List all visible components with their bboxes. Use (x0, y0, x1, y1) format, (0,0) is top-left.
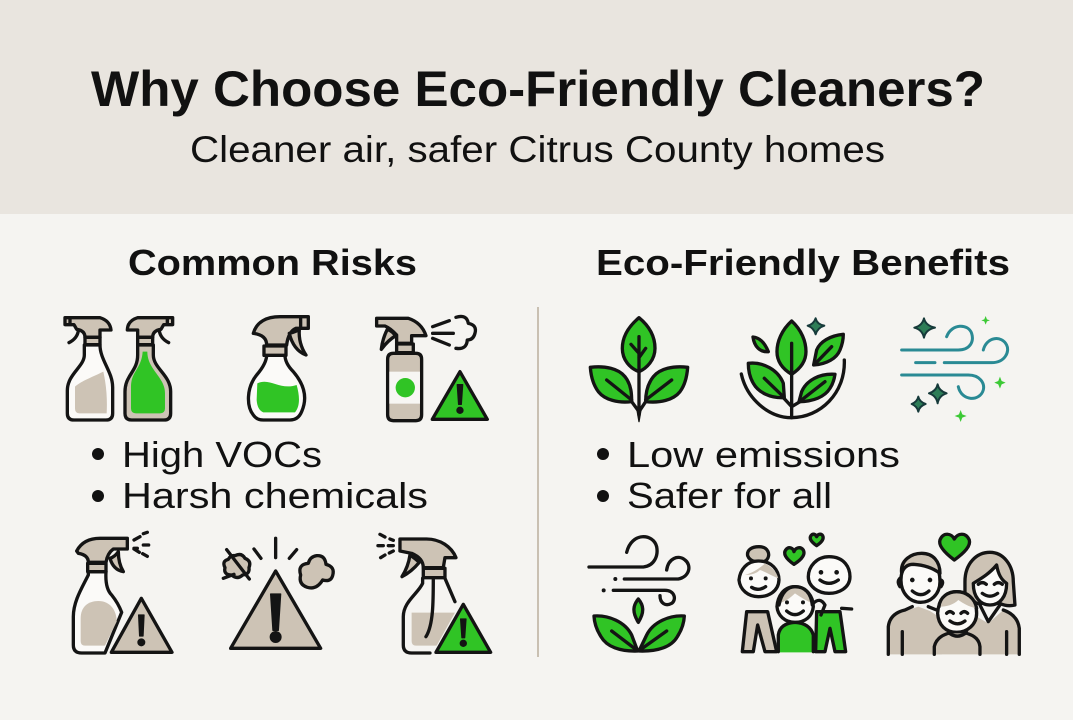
icon: parents and child with heart (888, 534, 1020, 654)
icon: bottle with warning (73, 532, 172, 653)
icon: family of three with hearts (739, 534, 852, 652)
icon: wind with sparkles (902, 316, 1008, 422)
bullet list: benefits (597, 434, 900, 516)
icon: spray can with warning (377, 316, 487, 421)
heading: common risks: Common Risks (128, 242, 417, 283)
subtitle: Cleaner air, safer Citrus County homes (190, 129, 885, 170)
bullet list: benefits: Low emissions (627, 434, 900, 475)
icon: three-leaf sprout (590, 318, 688, 422)
header band (0, 0, 1073, 214)
title: Why Choose Eco-Friendly Cleaners? (91, 61, 985, 117)
bullet list: risks: High VOCs (122, 434, 322, 475)
bullet list: risks (92, 434, 428, 516)
icon row: risk bottles top (65, 316, 487, 421)
panel: eco-friendly benefits (589, 242, 1020, 654)
icon: large warning with fumes (223, 538, 333, 648)
icon row: benefits top (590, 316, 1008, 422)
panel: common risks (65, 242, 491, 653)
icon: sprout with breeze (589, 537, 689, 651)
icon: round spray bottle (248, 317, 308, 420)
icon row: benefits bottom (589, 534, 1020, 654)
bullet list: risks: Harsh chemicals (122, 475, 428, 516)
icon row: risk bottles bottom (73, 532, 491, 653)
icon: leaves in a bowl (741, 318, 844, 418)
icon: two spray bottles (65, 318, 173, 420)
heading: eco-friendly benefits: Eco-Friendly Benefits (596, 242, 1010, 283)
divider (537, 307, 539, 657)
bullet list: benefits: Safer for all (627, 475, 832, 516)
icon: dip-tube bottle with green warning (378, 534, 491, 653)
